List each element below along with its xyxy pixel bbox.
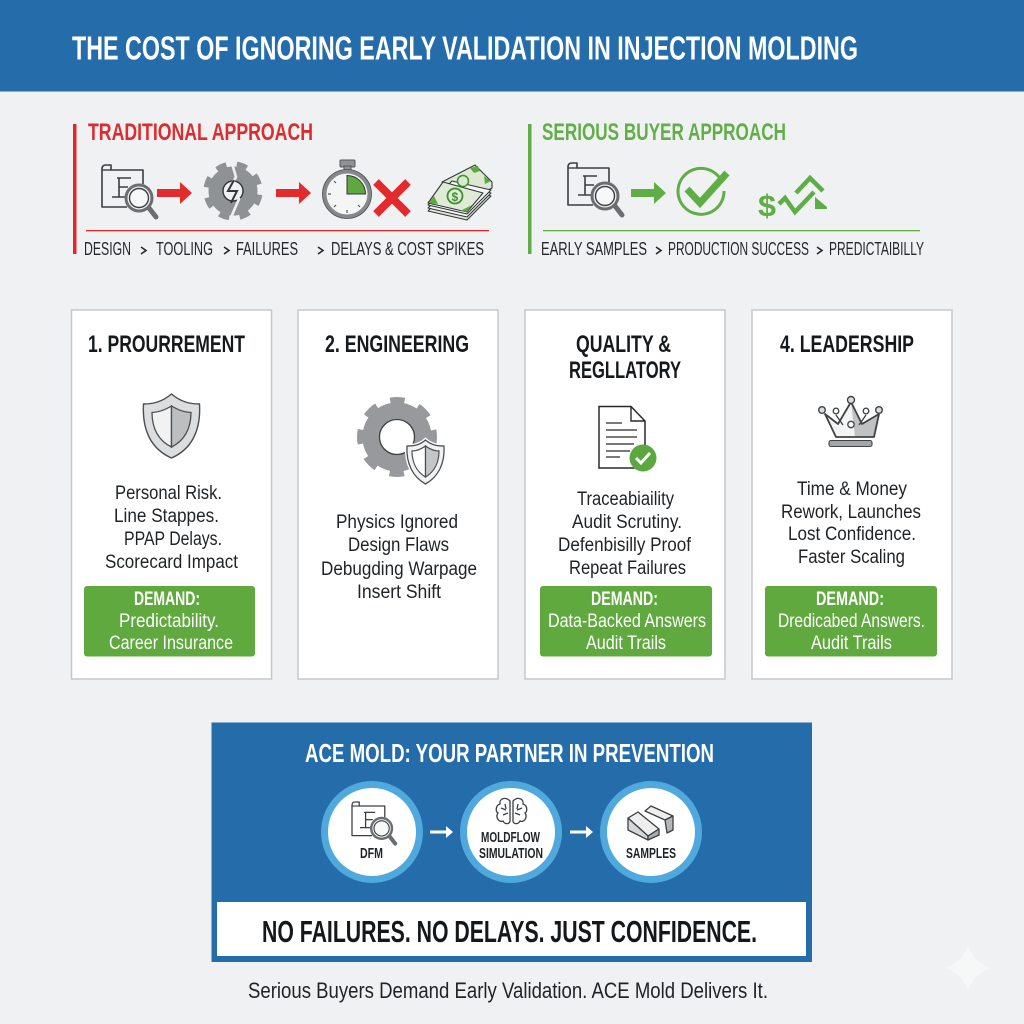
icon: red cross xyxy=(376,182,408,214)
heading xyxy=(569,331,681,384)
step: moldflow simulation: SIMULATION xyxy=(479,846,543,862)
demand box: Predictability. xyxy=(119,611,219,632)
body text: Personal Risk. xyxy=(115,483,222,504)
step: moldflow simulation: MOLDFLOW xyxy=(481,830,540,846)
body text: Rework, Launches xyxy=(781,502,921,523)
panel: procurement xyxy=(72,310,272,679)
body text xyxy=(105,483,239,573)
step: dfm: DFM xyxy=(360,846,383,862)
process labels: serious buyer: PREDICTAIBILLY xyxy=(829,239,924,259)
panel: quality and regulatory xyxy=(525,310,725,679)
body text: Audit Scrutiny. xyxy=(572,512,682,533)
icon: money stack: $ xyxy=(452,190,458,204)
demand box: DEMAND: xyxy=(591,589,658,610)
icon: dollar and trend xyxy=(758,178,827,223)
body text: PPAP Delays. xyxy=(124,529,222,550)
body text: Repeat Failures xyxy=(569,558,686,579)
demand box: Dredicabed Answers. xyxy=(778,611,925,632)
callout: no failures xyxy=(217,902,806,956)
body text: Defenbisilly Proof xyxy=(558,535,692,556)
arrow xyxy=(570,826,593,838)
body text xyxy=(321,512,477,603)
demand box: Audit Trails xyxy=(811,633,892,654)
demand box xyxy=(540,586,712,656)
icon: document with check xyxy=(599,406,656,472)
icon: sample blocks xyxy=(628,806,673,840)
process labels: traditional: TOOLING xyxy=(156,239,213,259)
icon: design document with magnifier xyxy=(568,163,622,215)
icon: money stack xyxy=(428,165,492,220)
icon: dollar and trend: $ xyxy=(758,188,776,223)
body text: Line Stappes. xyxy=(114,506,219,527)
demand box: DEMAND: xyxy=(816,589,884,610)
process labels: serious buyer: PRODUCTION SUCCESS xyxy=(668,239,809,259)
body text: Traceabiaility xyxy=(577,489,674,510)
arrow xyxy=(430,826,453,838)
step: samples: SAMPLES xyxy=(626,846,676,862)
icon: brain xyxy=(496,798,527,824)
process labels: traditional: DELAYS & COST SPIKES xyxy=(331,239,484,259)
process labels: traditional: DESIGN xyxy=(84,239,131,259)
process labels: serious buyer: EARLY SAMPLES xyxy=(541,239,647,259)
icon: shield xyxy=(143,394,200,458)
demand box: Data-Backed Answers xyxy=(548,611,706,632)
icon: broken gear xyxy=(204,160,262,222)
panel: engineering xyxy=(298,310,498,679)
heading: 2. ENGINEERING xyxy=(325,331,469,358)
step: moldflow simulation xyxy=(464,784,558,880)
process labels: traditional xyxy=(84,239,484,259)
icon: gear with shield xyxy=(356,396,444,484)
panel: traditional approach xyxy=(73,119,492,259)
body text: Lost Confidence. xyxy=(788,524,916,545)
body text: Scorecard Impact xyxy=(105,552,239,573)
heading: ACE MOLD: YOUR PARTNER IN PREVENTION xyxy=(305,738,714,768)
demand box: Career Insurance xyxy=(109,633,233,654)
callout: no failures: NO FAILURES. NO DELAYS. JUST CONFIDENCE. xyxy=(262,914,757,949)
demand box: DEMAND: xyxy=(134,589,200,610)
heading: 1. PROURREMENT xyxy=(88,331,245,358)
body text: Physics Ignored xyxy=(336,512,458,533)
demand box: Audit Trails xyxy=(586,633,666,654)
heading: serious buyer approach: SERIOUS BUYER APPROACH xyxy=(542,119,786,146)
body text: Time & Money xyxy=(797,479,907,500)
panel: ace mold xyxy=(212,722,812,962)
body text: Design Flaws xyxy=(348,535,449,556)
heading: 4. LEADERSHIP xyxy=(780,331,914,358)
heading: traditional approach: TRADITIONAL APPROACH xyxy=(88,119,313,146)
demand box xyxy=(84,586,255,656)
body text xyxy=(781,479,921,568)
step: dfm xyxy=(324,784,420,880)
step: samples xyxy=(604,784,698,880)
panel: serious buyer approach xyxy=(528,119,924,259)
footer tagline: Serious Buyers Demand Early Validation. ACE Mold Delivers It. xyxy=(248,978,768,1003)
body text: Debugding Warpage xyxy=(321,559,477,580)
icon: sparkle watermark xyxy=(944,944,992,992)
icon: crown xyxy=(819,396,882,446)
body text xyxy=(558,489,692,579)
panel: leadership xyxy=(752,310,952,679)
body text: Insert Shift xyxy=(357,582,442,603)
arrow xyxy=(276,182,311,204)
demand box xyxy=(765,586,937,656)
process labels: serious buyer xyxy=(541,239,924,259)
icon: stopwatch xyxy=(322,160,372,218)
arrow xyxy=(157,182,192,204)
heading: QUALITY & xyxy=(576,331,671,358)
icon: design document with magnifier xyxy=(102,165,156,217)
heading: REGLLATORY xyxy=(569,357,681,384)
arrow xyxy=(631,182,666,204)
icon: check circle xyxy=(678,168,727,214)
body text: Faster Scaling xyxy=(798,547,905,568)
header banner xyxy=(0,0,1024,92)
process labels: traditional: FAILURES xyxy=(236,239,298,259)
